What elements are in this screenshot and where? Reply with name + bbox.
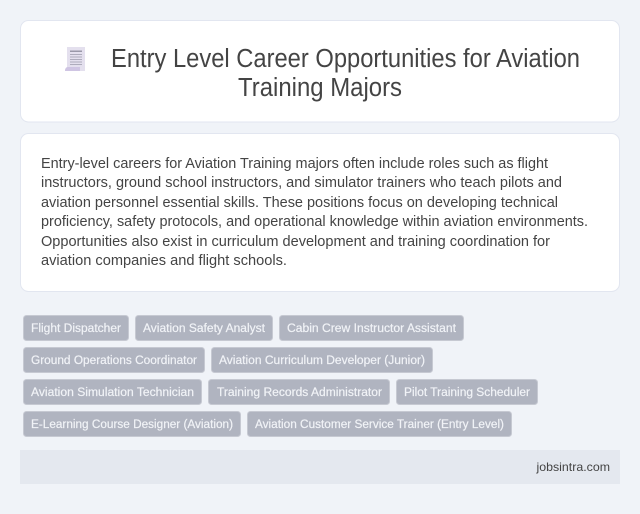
tag: Pilot Training Scheduler: [396, 380, 538, 404]
text block: description: aviation personnel essential skills. These positions focus on developing technical: [41, 195, 558, 211]
panel: header: [20, 20, 620, 122]
text block: description: proficiency, safety protocols, and operational knowledge within aviation environments.: [41, 214, 588, 230]
tag: Aviation Curriculum Developer (Junior): Aviation Curriculum Developer (Junior): [219, 353, 425, 367]
tag: Aviation Simulation Technician: [24, 380, 202, 404]
title: Entry Level Career Opportunities for Aviation: [111, 45, 580, 73]
title: Training Majors: [238, 74, 402, 102]
tag: Pilot Training Scheduler: Pilot Training Scheduler: [404, 385, 530, 399]
text block: description: aviation companies and flight schools.: [41, 253, 287, 269]
tag: Aviation Curriculum Developer (Junior): [212, 348, 432, 372]
text block: description: Opportunities also exist in curriculum development and training coordination for: [41, 234, 550, 250]
tag: Aviation Customer Service Trainer (Entry Level): [248, 412, 512, 436]
panel: description: [20, 134, 620, 292]
tag: Aviation Customer Service Trainer (Entry Level): Aviation Customer Service Trainer (Entry Level): [255, 417, 504, 431]
icon: document scroll: [65, 47, 85, 71]
tag: Aviation Safety Analyst: [136, 316, 272, 340]
footer: [20, 450, 620, 484]
tag: E-Learning Course Designer (Aviation): [24, 412, 240, 436]
tag: Flight Dispatcher: Flight Dispatcher: [31, 321, 121, 335]
text block: description: [41, 156, 588, 269]
tag: Flight Dispatcher: [24, 316, 128, 340]
tag: Aviation Simulation Technician: Aviation Simulation Technician: [31, 385, 194, 399]
tag: Ground Operations Coordinator: Ground Operations Coordinator: [31, 353, 197, 367]
tag: Aviation Safety Analyst: Aviation Safety Analyst: [143, 321, 266, 335]
tag: E-Learning Course Designer (Aviation): E-Learning Course Designer (Aviation): [31, 417, 233, 431]
tag: Training Records Administrator: [208, 380, 390, 404]
tag: Ground Operations Coordinator: [24, 348, 204, 372]
tag: Cabin Crew Instructor Assistant: [280, 316, 464, 340]
tag list: [24, 316, 538, 436]
text block: description: instructors, ground school instructors, and simulator trainers who teach pilots and: [41, 175, 562, 191]
tag: Training Records Administrator: Training Records Administrator: [217, 385, 382, 399]
title: [111, 45, 580, 102]
tag: Cabin Crew Instructor Assistant: Cabin Crew Instructor Assistant: [287, 321, 457, 335]
footer: jobsintra.com: [535, 460, 610, 474]
text block: description: Entry-level careers for Aviation Training majors often include roles such as flight: [41, 156, 548, 172]
